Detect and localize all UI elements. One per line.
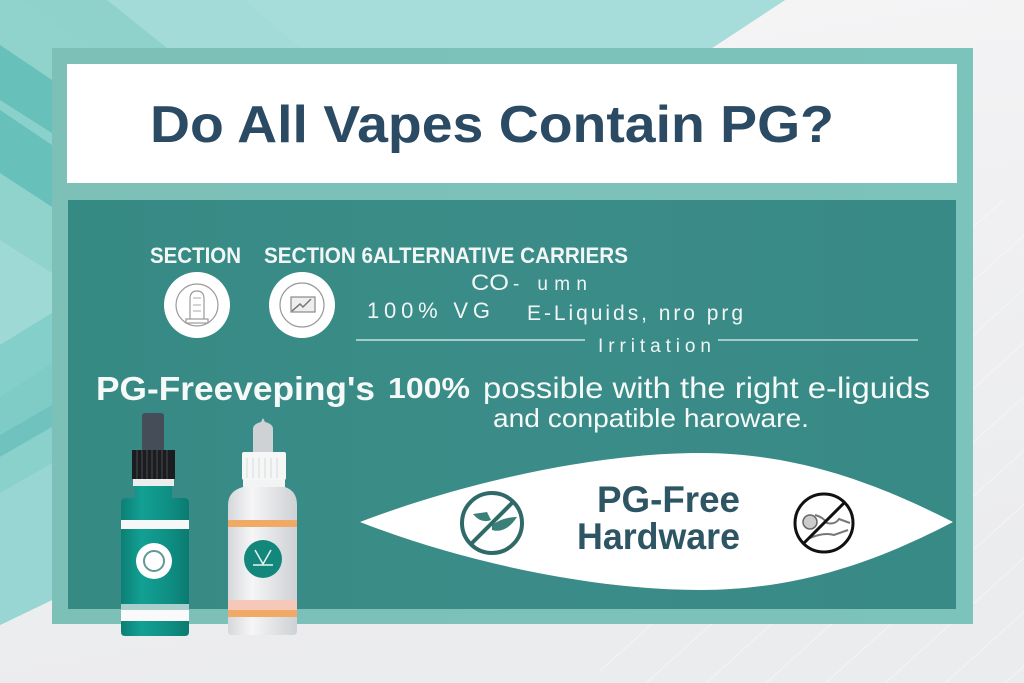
statement regular line 1: possible with the right e-liguids <box>483 372 930 405</box>
content panel <box>68 200 956 609</box>
icon: device <box>164 272 230 338</box>
title: Do All Vapes Contain PG? <box>150 96 834 154</box>
divider with irritation label: Irritation <box>598 336 711 357</box>
lens callout: PG-Free hardware: Hardware <box>577 516 740 557</box>
bottle: silver dropper <box>228 418 297 635</box>
bottle: green dropper <box>121 413 189 636</box>
100% VG label: 100% VG <box>367 298 490 323</box>
statement regular line 2: and conpatible haroware. <box>493 403 809 433</box>
statement bold <box>96 370 470 407</box>
icon: crossed molecule <box>795 494 853 552</box>
column label <box>471 270 587 295</box>
lens callout: PG-Free hardware <box>360 453 953 590</box>
callout text: PG-Free <box>597 479 740 520</box>
e-liquids label: E-Liquids, nro prg <box>527 302 743 325</box>
title panel <box>67 64 957 183</box>
outer frame <box>52 48 973 624</box>
icon: crossed leaf <box>462 493 522 553</box>
section label 2 with alternative carriers heading: SECTION 6ALTERNATIVE CARRIERS <box>264 243 628 268</box>
section label 1: SECTION <box>150 243 241 268</box>
column label: - umn <box>513 274 587 295</box>
statement bold: PG-Freeveping's <box>96 370 375 407</box>
statement bold: 100% <box>388 373 470 405</box>
column label: CO <box>471 270 509 295</box>
icon: cartridge <box>269 272 335 338</box>
